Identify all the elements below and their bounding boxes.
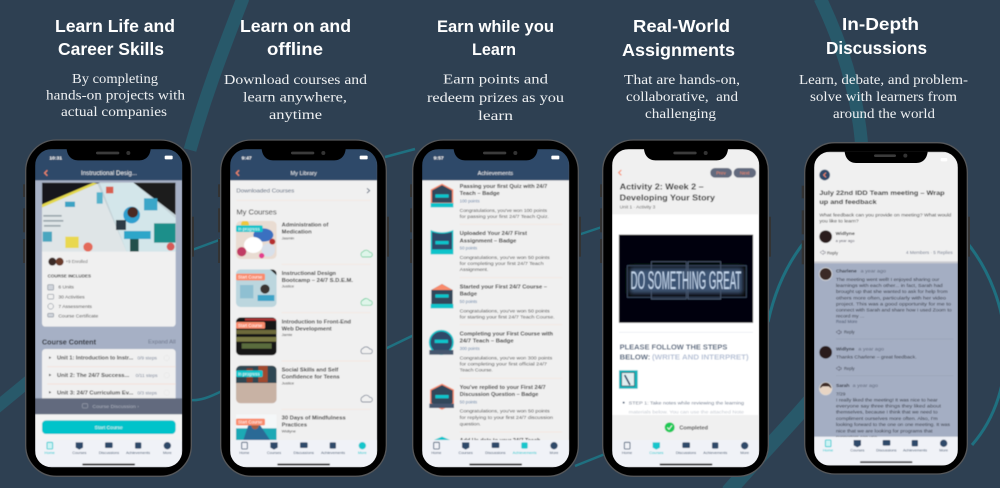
phone 1: course overview: COURSE INCLUDES xyxy=(48,274,91,279)
phone 2: my library: Discussions xyxy=(293,451,314,455)
phone 1: course overview: Course Content xyxy=(42,337,97,346)
phone 5: discussion: compliment ourselves more often. Also, I'm xyxy=(836,416,938,422)
phone 5: discussion: Thanks Charlene – great feedback. xyxy=(836,355,917,361)
phone 2: my library: Justice xyxy=(282,380,295,385)
phone 3: achievements: More xyxy=(550,451,558,455)
description 4: That are hands-on, xyxy=(624,72,740,87)
phone 1: course overview: +9 Enrolled xyxy=(66,259,88,264)
phone 5: discussion: 4 Members · 5 Replies xyxy=(906,250,953,255)
description 3: redeem prizes as you xyxy=(427,90,564,105)
phone 2: my library: Web Development xyxy=(282,326,332,332)
phone 1: course overview: 0/9 steps xyxy=(137,356,158,362)
phone 5: discussion: project. This was a good opportunity for me to xyxy=(836,301,951,307)
phone 2: my library: Jamie xyxy=(282,332,293,337)
phone 2: my library: 9:47 xyxy=(242,155,252,161)
phone 4: activity xyxy=(600,140,771,476)
phone 2: my library: Courses xyxy=(267,451,281,455)
phone 5: discussion: Widlyne xyxy=(836,231,855,237)
phone 5: discussion: Achievements xyxy=(903,449,927,453)
phone 5: discussion: What feedback can you provide on meeting? What would xyxy=(819,212,952,218)
phone 3: achievements: Assignment. xyxy=(460,267,488,272)
phone 2: my library: Start Course xyxy=(238,420,263,425)
phone 3: achievements: Badge xyxy=(460,292,477,298)
phone 3: achievements: 50 points xyxy=(460,299,477,304)
description 1: actual companies xyxy=(61,104,167,119)
phone 3: achievements: Passing your first Quiz with 24/7 xyxy=(460,184,547,190)
phone 1: course overview: 30 Activities xyxy=(58,294,85,300)
phone 3: achievements: Assignment – Badge xyxy=(460,238,516,244)
phone 4: activity: Discussions xyxy=(676,451,696,455)
description 3: Earn points and xyxy=(443,72,548,86)
phone 5: discussion: July 22nd IDD Team meeting – Wrap xyxy=(819,190,945,197)
heading block 5 xyxy=(826,14,927,58)
phone 3: achievements: Discussion Question – Badge xyxy=(460,392,538,398)
phone 3: achievements xyxy=(410,140,581,476)
heading block 3: Learn xyxy=(472,41,516,59)
phone 4: activity: BELOW: xyxy=(620,352,650,361)
phone 3: achievements: Add Us date to your 24/7 Teach xyxy=(460,438,540,444)
heading block 2 xyxy=(240,16,351,59)
description 1: By completing xyxy=(72,71,158,86)
phone 2: my library xyxy=(218,140,389,476)
phone 2: my library: Widlyne xyxy=(282,429,297,434)
phone 3: achievements: Achievements xyxy=(513,451,537,455)
phone 2: my library: My Library xyxy=(290,171,317,177)
phone 2: my library: Social Skills and Self xyxy=(282,367,339,373)
phone 3: achievements: Uploaded Your 24/7 First xyxy=(460,231,527,237)
phone 5: discussion: Discussions xyxy=(876,449,897,453)
description 5: Learn, debate, and problem- xyxy=(799,72,969,87)
phone 1: course overview: Course Certificate xyxy=(58,314,98,320)
heading block 2: offline xyxy=(267,39,323,59)
phone 3: achievements: question. xyxy=(460,421,481,426)
phone 5: discussion: Reply xyxy=(844,366,856,371)
description 2 xyxy=(224,72,367,122)
phone 4: activity: Home xyxy=(622,451,632,455)
phone 5: discussion: others more often, particularly with her video xyxy=(836,295,946,301)
phone 2: my library: 30 Days of Mindfulness xyxy=(282,416,346,422)
phone 1: course overview: Unit 2: The 24/7 Success... xyxy=(57,373,130,379)
phone 5: discussion: connect with Sarah and share how I used Zoom to xyxy=(836,307,952,313)
phone 5: discussion: everyone say three things they liked about xyxy=(836,404,942,410)
heading block 1: Learn Life and xyxy=(55,16,175,36)
phone 5: discussion: More xyxy=(939,449,948,453)
heading block 3: Earn while you xyxy=(437,18,554,36)
description 3 xyxy=(427,72,564,123)
heading block 5: Discussions xyxy=(826,38,927,58)
phone 3: achievements: Congratulations, you've won 300 points xyxy=(460,355,553,360)
phone 3: achievements: Congratulations, you've won 50 points xyxy=(460,409,550,414)
description 4: challenging xyxy=(645,106,716,121)
phone 1: course overview: More xyxy=(163,451,172,455)
phone 1: course overview: 0/11 steps xyxy=(136,373,158,379)
phone 5: discussion: a year ago xyxy=(853,383,878,389)
phone 3: achievements: Congratulations, you've won 100 points xyxy=(460,208,548,213)
phone 5: discussion: brought up that she wanted to ask for help from xyxy=(836,289,948,295)
heading block 4: Assignments xyxy=(622,40,735,60)
phone 2: my library: Medication xyxy=(282,230,312,236)
phone 5: discussion: supporters can use xyxy=(836,434,877,440)
phone 3: achievements: Completing your First Course with xyxy=(460,332,553,338)
phone 1: course overview: Discussions xyxy=(99,451,119,455)
phone 5: discussion: Charlene xyxy=(836,269,857,275)
phone 1: course overview: Unit 3: 24/7 Curriculum Ev... xyxy=(57,390,134,396)
phone 2: my library: My Courses xyxy=(236,209,277,216)
description 5: solve with learners from xyxy=(810,89,957,104)
phone 2: my library: Instructional Design xyxy=(282,271,336,277)
phone 3: achievements: Discussions xyxy=(485,451,506,455)
phone 3: achievements: 9:57 xyxy=(434,155,444,161)
phone 5: discussion: Reply xyxy=(827,250,839,255)
phone 2: my library: Administration of xyxy=(282,223,329,229)
phone 3: achievements: for starting your first 24/7 Teach Course. xyxy=(460,314,555,319)
phone 5: discussion: you like to learn? xyxy=(819,218,859,224)
phone 3: achievements: Home xyxy=(431,451,441,455)
phone 5: discussion: Courses xyxy=(850,449,865,453)
phone 5: discussion: themselves, because I think that we need to xyxy=(836,410,938,416)
phone 5: discussion: up and feedback xyxy=(819,199,877,206)
phone 1: course overview: Start Course xyxy=(95,425,123,431)
phone 4: activity: Prev xyxy=(716,171,726,176)
phone 4: activity: Next xyxy=(740,171,750,176)
phone 3: achievements: for replying to your first 24/7 discussion xyxy=(460,415,553,420)
phone 3: achievements: 50 points xyxy=(460,400,477,405)
phone 5: discussion: a year ago xyxy=(861,269,886,275)
heading block 4: Real-World xyxy=(633,16,730,36)
phone 4: activity: Courses xyxy=(649,451,664,455)
phone 3: achievements: Congratulations, you've won 50 points xyxy=(460,255,550,260)
phone 1: course overview: Instructional Desig... xyxy=(81,171,137,177)
phone 1: course overview: Unit 1: Introduction to Instr... xyxy=(57,356,134,362)
phone 5: discussion: The meeting went well! I enjoyed sharing our xyxy=(836,277,940,283)
description 2: Download courses and xyxy=(224,72,367,87)
phone 1: course overview: 10:31 xyxy=(49,155,62,161)
phone 2: my library: More xyxy=(358,451,367,455)
phone 5: discussion: I really liked the meeting! It was nice to hear xyxy=(836,398,938,404)
text: DO SOMETHING GREAT xyxy=(631,267,741,295)
phone 3: achievements: 24/7 Teach – Badge xyxy=(460,339,514,345)
phone 2: my library: Justice xyxy=(282,284,295,289)
description 4: collaborative, and xyxy=(626,89,738,104)
heading block 1: Career Skills xyxy=(58,39,164,59)
phone 1: course overview: Course Discussion › xyxy=(92,404,139,410)
description 2: learn anywhere, xyxy=(243,90,347,104)
phone 5: discussion: looking forward to the one on one meeting. It was xyxy=(836,422,951,428)
phone 5: discussion: Reply xyxy=(844,330,856,335)
phone 1: course overview: 7 Assessments xyxy=(58,304,92,310)
heading block 3 xyxy=(437,18,554,59)
phone 3: achievements: Courses xyxy=(459,451,473,455)
phone 4: activity: (WRITE AND INTERPRET) xyxy=(652,352,749,361)
phone 2: my library: Start Course xyxy=(238,323,263,328)
phone 3: achievements: Achievements xyxy=(478,171,513,177)
phone 3: achievements: Congratulations, you've won 50 points xyxy=(460,308,550,313)
phone 2: my library: In progress xyxy=(238,226,260,231)
description 1: hands-on projects with xyxy=(46,88,185,102)
phone 3: achievements: for completing your first official 24/7 xyxy=(460,361,547,366)
phone 1: course overview: 0/3 steps xyxy=(137,390,158,396)
phone 2: my library: Confidence for Teens xyxy=(282,375,340,381)
phone 5: discussion: Widlyne xyxy=(836,347,855,353)
description 5: around the world xyxy=(833,106,935,121)
phone 2: my library: Start Course xyxy=(238,275,263,280)
phone 5: discussion: record my ... xyxy=(836,314,864,320)
phone 4: activity: PLEASE FOLLOW THE STEPS xyxy=(620,343,727,352)
phone 3: achievements: for completing your first 24/7 Teach xyxy=(460,261,544,266)
phone 4: activity: Completed xyxy=(679,425,708,431)
phone 2: my library: Bootcamp – 24/7 S.D.E.M. xyxy=(282,278,354,284)
phone 3: achievements: Teach – Badge xyxy=(460,191,500,197)
phone 4: activity: Unit 1 · Activity 3 xyxy=(620,205,656,210)
description 4 xyxy=(624,72,740,121)
phone 3: achievements: You've replied to your First 24/7 xyxy=(460,385,546,391)
phone 5: discussion: Sarah xyxy=(836,383,849,389)
phone 3: achievements: Started your First 24/7 Course – xyxy=(460,285,547,291)
phone 5: discussion xyxy=(802,143,970,474)
phone 5: discussion: Home xyxy=(823,449,833,453)
phone 5: discussion: a year ago xyxy=(836,238,855,243)
phone 5: discussion: nice that we are looking for programs that xyxy=(836,428,933,434)
phone 4: activity: STEP 1: Take notes while reviewing the learning xyxy=(629,400,744,406)
description 2: anytime xyxy=(269,107,322,122)
phone 5: discussion: 7/29 xyxy=(836,391,846,397)
phone 1: course overview: Expand All xyxy=(148,340,176,346)
phone 4: activity: Developing Your Story xyxy=(620,192,715,202)
phone 2: my library: Downloaded Courses xyxy=(236,188,295,194)
phone 2: my library: In progress xyxy=(238,371,260,376)
heading block 4 xyxy=(622,16,735,60)
phone 2: my library: Home xyxy=(239,451,249,455)
phone 2: my library: Practices xyxy=(282,423,307,429)
phone 4: activity: materials below. You can use the attached Note xyxy=(629,410,744,416)
phone 3: achievements: for passing your first 24/7 Teach Quiz. xyxy=(460,214,549,219)
phone 1: course overview: Achievements xyxy=(126,451,150,455)
phone 4: activity: Activity 2: Week 2 – xyxy=(620,181,704,191)
description 3: learn xyxy=(478,108,513,123)
phone 4: activity: More xyxy=(740,451,749,455)
phone 5: discussion: Read More xyxy=(836,319,858,324)
phone 3: achievements: 50 points xyxy=(460,246,477,251)
phone 4: activity: Achievements xyxy=(703,451,727,455)
phone 3: achievements: Teach Course. xyxy=(460,368,493,373)
phone 1: course overview: Home xyxy=(45,451,55,455)
description 5 xyxy=(799,72,969,121)
phone 1: course overview: 6 Units xyxy=(58,285,74,291)
heading block 1 xyxy=(55,16,175,59)
heading block 5: In-Depth xyxy=(842,14,919,34)
phone 3: achievements: 300 points xyxy=(460,346,480,351)
phone 3: achievements: 100 points xyxy=(460,199,480,204)
phone 5: discussion: a year ago xyxy=(858,347,884,353)
phone 2: my library: Achievements xyxy=(321,451,345,455)
phone 5: discussion: learnings with each other... in fact, Sarah had xyxy=(836,283,943,289)
heading block 2: Learn on and xyxy=(240,16,351,36)
phone 1: course overview: Courses xyxy=(72,451,87,455)
phone 1: course overview xyxy=(23,140,194,476)
phone 2: my library: Jasmin xyxy=(282,235,294,240)
description 1 xyxy=(46,71,185,119)
phone 2: my library: Introduction to Front-End xyxy=(282,319,351,325)
